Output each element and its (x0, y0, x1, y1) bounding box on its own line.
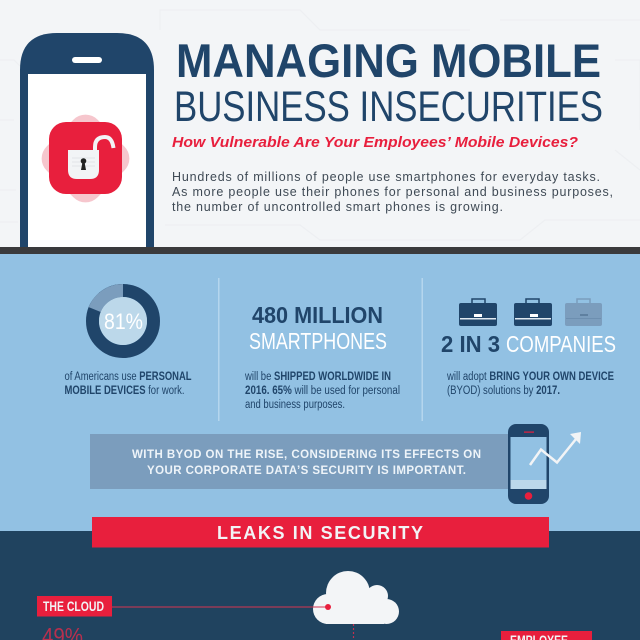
navy section (0, 531, 640, 640)
callout: BYOD (90, 434, 510, 489)
panel: 2 in 3 companies: 2 IN 3 (441, 331, 500, 357)
title: MANAGING MOBILE (176, 34, 601, 87)
icon: unlocked padlock (35, 108, 136, 209)
connector: cloud to label (112, 604, 331, 610)
stat caption (244, 371, 400, 411)
icon: phone with rising arrow (508, 424, 581, 504)
stat caption: will adopt BRING YOUR OWN DEVICE (446, 371, 614, 383)
label: the cloud: THE CLOUD (43, 599, 104, 614)
subtitle: How Vulnerable Are Your Employees’ Mobile Devices? (172, 134, 578, 151)
stat caption: 2016. 65% will be used for personal (245, 385, 400, 397)
donut chart: 81% (104, 309, 143, 334)
stat caption (64, 371, 192, 397)
heading banner: leaks in security: LEAKS IN SECURITY (217, 523, 423, 543)
title (174, 34, 603, 131)
connector: cloud downward (352, 624, 354, 640)
callout: BYOD: YOUR CORPORATE DATA’S SECURITY IS IMPORTANT. (147, 465, 466, 477)
intro paragraph: As more people use their phones for personal and business purposes, (172, 185, 613, 199)
panel: 2 in 3 companies (441, 299, 616, 397)
panel: 81% stat (64, 290, 192, 397)
panel: 480 million smartphones (244, 302, 400, 411)
panel: 480 million smartphones: SMARTPHONES (249, 328, 387, 354)
intro paragraph: the number of uncontrolled smart phones is growing. (172, 200, 503, 214)
heading banner: leaks in security (92, 517, 549, 548)
callout: BYOD: WITH BYOD ON THE RISE, CONSIDERING ITS EFFECTS ON (132, 449, 481, 461)
stat caption: (BYOD) solutions by 2017. (447, 385, 560, 397)
intro paragraph (172, 170, 613, 214)
label: the cloud (37, 596, 112, 616)
label: employee (501, 631, 592, 640)
intro paragraph: Hundreds of millions of people use smartphones for everyday tasks. (172, 170, 600, 184)
header phone illustration (20, 33, 154, 247)
stat caption: will be SHIPPED WORLDWIDE IN (244, 371, 391, 383)
icon: briefcases (459, 299, 602, 326)
icon: cloud (313, 571, 399, 624)
stat caption (446, 371, 614, 397)
stat caption: and business purposes. (245, 399, 345, 411)
panel: 480 million smartphones: 480 MILLION (252, 302, 383, 328)
stat caption: MOBILE DEVICES for work. (64, 385, 184, 397)
dark divider band (0, 247, 640, 254)
stat caption: of Americans use PERSONAL (64, 371, 192, 383)
blue stats section (0, 254, 640, 532)
